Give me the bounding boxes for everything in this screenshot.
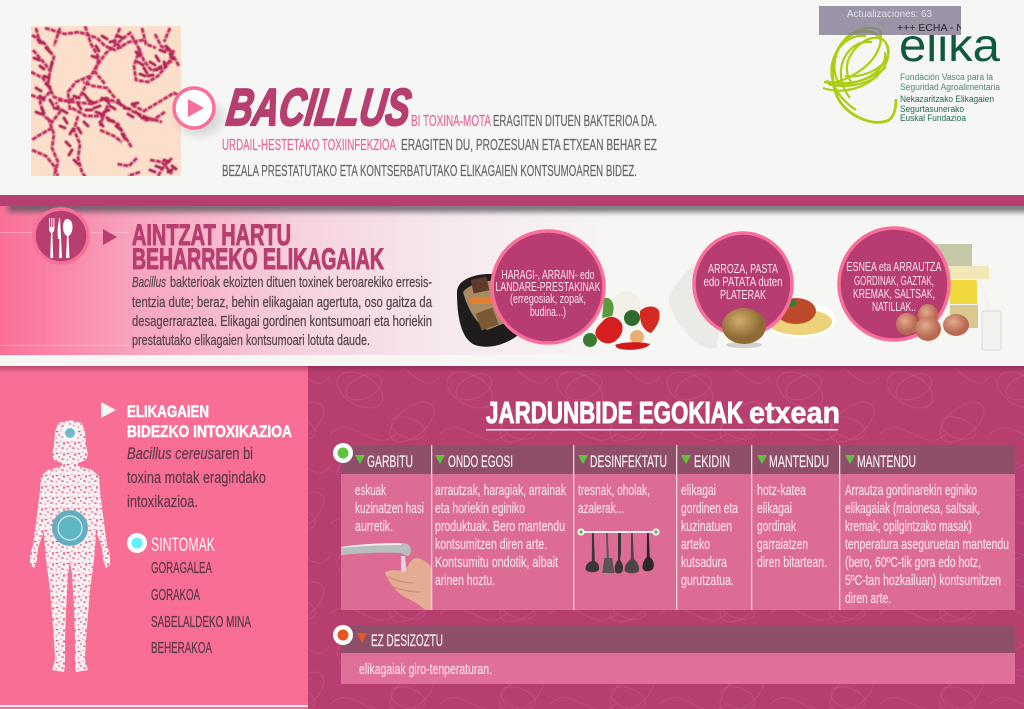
circle: rice, pasta, potato dishes: edo PATATA duten [704,275,783,289]
column: ONDO EGOSI: arrautzak, haragiak, arrainak [435,483,567,499]
column: EKIDIN: kutsadura [681,555,728,571]
symptoms: SABELALDEKO MINA [151,614,251,631]
column: GARBITU: aurretik. [355,519,393,535]
column: ONDO EGOSI: Kontsumitu ondotik, albait [435,555,558,571]
circle: milk, eggs, cheese [839,228,949,340]
text block: Bacillus [132,274,166,291]
circle: milk, eggs, cheese: NATILLAK.. [872,300,916,314]
column: EKIDIN: elikagai [681,483,716,499]
updates ticker [819,6,964,35]
column: GARBITU: kuzinatzen hasi [355,501,424,517]
text block: desagerraraztea. Elikagai gordinen kontsumoari eta horiekin [132,313,432,330]
food: stew bowl [457,274,517,347]
heading: ELIKAGAIEN [127,402,209,421]
heading [127,402,292,441]
symptoms: GORAGALEA [151,560,212,577]
do-not-defrost box: EZ DESIZOZTU [371,631,443,650]
updates ticker: Actualizaciones: 63 [847,8,932,20]
logo: elika: Euskal Fundazioa [900,113,966,123]
column: GARBITU [341,452,431,610]
microscope photo of bacillus [31,26,182,178]
heading: etxean [749,395,840,430]
logo: elika: Fundación Vasca para la [900,72,993,82]
text block [132,274,432,349]
logo: elika [823,19,1000,123]
column: ONDO EGOSI: kontsumitzen diren arte. [435,537,547,553]
icon: human body [28,418,112,674]
bullet [333,443,353,463]
arrow [101,402,116,418]
column: DESINFEKTATU: tresnak, oholak, [578,483,650,499]
text block: toxina motak eragindako [127,468,266,487]
column: DESINFEKTATU: DESINFEKTATU [590,452,667,471]
column: ONDO EGOSI: produktuak. Bero mantendu [435,519,565,535]
circle: meat, fish and vegetable dishes: (erregosiak, zopak, [510,292,586,306]
panel: good practices [308,366,1024,709]
symptoms: BEHERAKOA [151,640,212,657]
column: EKIDIN: EKIDIN [694,452,730,471]
column: MANTENDU (egg products): kremak, opilgintzako masak) [845,519,972,535]
icon: cutlery [34,209,88,263]
circle: rice, pasta, potato dishes [694,233,792,335]
intro text block: ERAGITEN DU, PROZESUAN ETA ETXEAN BEHAR EZ [401,137,657,154]
panel: header [31,6,1000,176]
text block [127,444,266,511]
circle: meat, fish and vegetable dishes: budina...) [530,305,566,319]
heading: BEHARREKO ELIKAGAIAK [132,243,384,276]
heading: AINTZAT HARTU [132,219,291,252]
column: EKIDIN: gurutzatua. [681,573,734,589]
circle: meat, fish and vegetable dishes: HARAGI-, ARRAIN- edo [502,268,595,282]
text block: tentzia dute; beraz, behin elikagaian agertuta, oso gaitza da [132,294,432,311]
icon: green swirl [823,28,896,122]
practices table [333,443,1015,610]
do-not-defrost box [333,625,1015,684]
column: MANTENDU (cold chain): elikagai [757,501,792,517]
column: MANTENDU (egg products): diren arte. [845,591,891,607]
arrow [103,229,117,245]
column: ONDO EGOSI: ONDO EGOSI [448,452,513,471]
food: vegetables [583,291,660,350]
column: MANTENDU (cold chain): hotz-katea [757,483,807,499]
column: ONDO EGOSI [435,452,567,589]
symptoms: GORAKOA [151,587,200,604]
column: DESINFEKTATU [578,452,667,574]
logo: elika: Segurtasunerako [900,104,964,114]
intro text block [222,113,657,180]
column: ONDO EGOSI: eta horiekin eginiko [435,501,525,517]
heading: JARDUNBIDE EGOKIAK [486,395,743,430]
column: ONDO EGOSI: arinen hoztu. [435,573,495,589]
food: pasta [764,298,836,338]
updates ticker: +++ ECHA - N [897,22,964,34]
logo: elika: elika [899,19,1000,71]
text block: intoxikazioa. [127,492,198,511]
column: MANTENDU (cold chain): diren bitartean. [757,555,827,571]
panel: food poisoning [0,366,308,709]
text block: prestatutako elikagaien kontsumoari lotuta daude. [132,332,370,349]
column: EKIDIN: gordinen eta [681,501,739,517]
intro text block: URDAIL-HESTETAKO TOXIINFEKZIOA [222,137,396,154]
text block: Bacillus cereus [127,444,214,463]
intro text block: ERAGITEN DITUEN BAKTERIOA DA. [493,113,657,130]
title: BACILLUS: BACILLUS [223,79,415,137]
circle: rice, pasta, potato dishes: ARROZA, PASTA [708,262,778,276]
column: MANTENDU (cold chain): gordinak [757,519,797,535]
column: EKIDIN [681,452,739,589]
food: eggs [896,304,969,341]
column: MANTENDU (egg products): MANTENDU [857,452,916,471]
circle: meat, fish and vegetable dishes [492,231,604,343]
circle: milk, eggs, cheese: KREMAK, SALTSAK, [853,287,935,301]
heading [132,219,384,276]
do-not-defrost box: elikagaiak giro-tenperaturan. [359,662,492,678]
symptoms [127,533,251,657]
food: potato [722,308,766,348]
play button [170,88,230,142]
column: GARBITU: eskuak [355,483,386,499]
intro text block: BEZALA PRESTATUTAKO ETA KONTSERBATUTAKO ELIKAGAIEN KONTSUMOAREN BIDEZ. [222,163,637,180]
food: rice [668,266,722,348]
logo: elika: Nekazaritzako Elikagaien [900,94,994,104]
circle: meat, fish and vegetable dishes: LANDARE-PRESTAKINAK [496,280,601,294]
text block: aren bi [214,444,253,463]
logo: elika: Seguridad Agroalimentaria [900,82,1000,92]
panel: foods to consider [0,195,1024,355]
column: MANTENDU (cold chain) [757,452,829,571]
circle: milk, eggs, cheese: ESNEA eta ARRAUTZA [846,260,942,274]
column: MANTENDU (cold chain): garraiatzen [757,537,808,553]
column: GARBITU: GARBITU [367,452,413,471]
circle: rice, pasta, potato dishes: PLATERAK [720,288,766,302]
food: cheese and milk [936,244,1001,350]
column: MANTENDU (cold chain): MANTENDU [769,452,829,471]
column: MANTENDU (egg products) [845,452,1009,607]
column: EKIDIN: kuzinatuen [681,519,732,535]
column: EKIDIN: arteko [681,537,710,553]
intro text block: BI TOXINA-MOTA [411,113,491,130]
circle: milk, eggs, cheese: GORDINAK, GAZTAK, [854,274,934,288]
icon: tap and hands [341,543,431,610]
heading: BIDEZKO INTOXIKAZIOA [127,422,292,441]
text block: bakterioak ekoizten dituen toxinek beroarekiko erresis- [170,274,432,291]
column: DESINFEKTATU: azalerak... [578,501,624,517]
icon: kitchen utensils on rail [578,528,660,574]
symptoms: SINTOMAK [151,535,215,556]
